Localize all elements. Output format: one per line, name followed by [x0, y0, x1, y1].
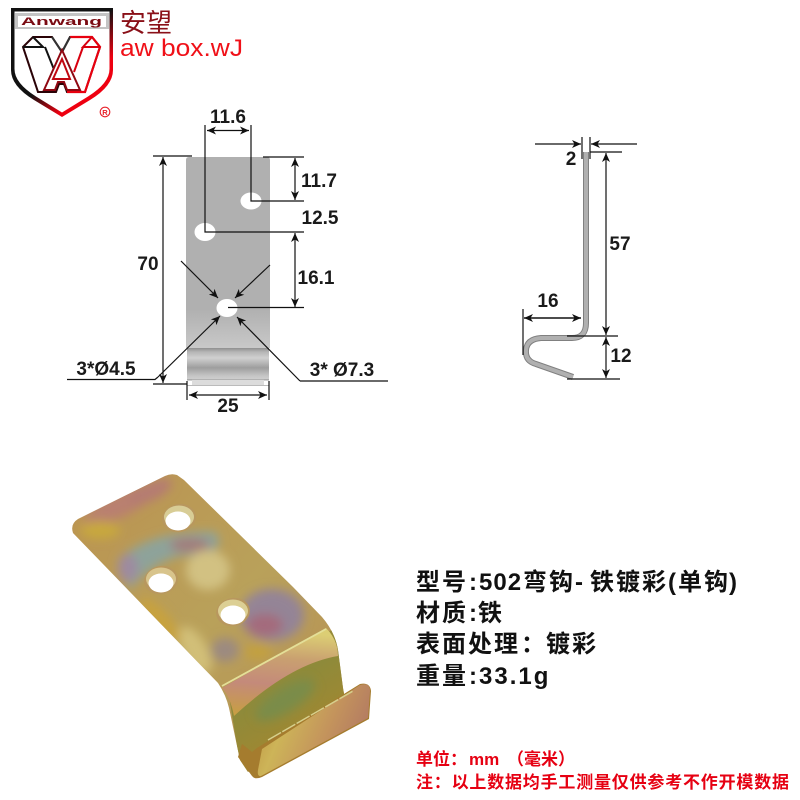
side-view drawing: [523, 137, 637, 379]
product photo: plated hook: [60, 465, 371, 785]
specification text: -: [575, 569, 585, 596]
dimension labels: 11.7: [301, 171, 337, 192]
side dimension labels: 16: [537, 291, 559, 312]
specification text: 重量: [416, 663, 468, 690]
icon: registered mark: [100, 107, 110, 117]
specification text: 铁镀彩: [590, 569, 668, 596]
brand name: [120, 3, 243, 62]
side dimension labels: 12: [610, 346, 632, 367]
specification text: :: [469, 569, 479, 596]
specification text: 502: [479, 569, 522, 596]
brand name: 安望: [120, 3, 172, 40]
hook body: [72, 474, 344, 772]
dimension lines: [67, 125, 388, 400]
side dimension lines: [523, 137, 637, 379]
brand name: aw box.wJ: [120, 35, 243, 62]
specification text: 材质: [416, 600, 468, 627]
specification text: 弯钩: [523, 568, 575, 596]
dimension labels: 12.5: [302, 208, 339, 229]
logo: Anwang shield: [11, 8, 113, 117]
specification text: 单钩: [678, 569, 730, 596]
specification text: ): [729, 569, 739, 596]
logo monogram: [23, 37, 100, 92]
dimension labels: 3*Ø4.5: [76, 359, 136, 380]
specification text: :33.1g: [469, 663, 550, 690]
side dimension labels: 57: [609, 234, 631, 255]
dimension labels: 11.6: [210, 107, 246, 128]
side dimension labels: [537, 149, 632, 367]
specification text: 型号: [416, 569, 468, 596]
plate: [186, 157, 270, 386]
notes in red: 注：以上数据均手工测量仅供参考不作开模数据: [416, 772, 790, 792]
dimension labels: 3* Ø7.3: [310, 360, 374, 381]
hook lip: [238, 684, 371, 778]
specification text: 铁: [478, 600, 504, 627]
front-view drawing: [67, 107, 388, 417]
dimension labels: 70: [137, 254, 159, 275]
notes in red: mm: [469, 750, 499, 769]
countersunk holes: [141, 501, 253, 629]
dimension labels: 16.1: [298, 268, 335, 289]
specification text: 表面处理: [416, 631, 520, 658]
notes in red: 单位：: [416, 750, 467, 769]
side dimension labels: 2: [566, 149, 576, 170]
rolled bend: [222, 628, 338, 716]
logo banner: Anwang: [21, 16, 102, 28]
dimension labels: [76, 107, 374, 417]
notes in red: （毫米）: [507, 749, 575, 769]
specification text: [416, 568, 739, 690]
notes in red: [416, 749, 790, 792]
specification text: 镀彩: [546, 631, 598, 658]
hook inner channel: [228, 628, 348, 772]
dimension labels: 25: [217, 396, 239, 417]
specification text: :: [469, 600, 479, 627]
specification text: ：: [521, 631, 547, 658]
icon: registered mark: R: [102, 108, 108, 117]
hook profile: [526, 152, 586, 377]
specification text: (: [668, 569, 678, 596]
